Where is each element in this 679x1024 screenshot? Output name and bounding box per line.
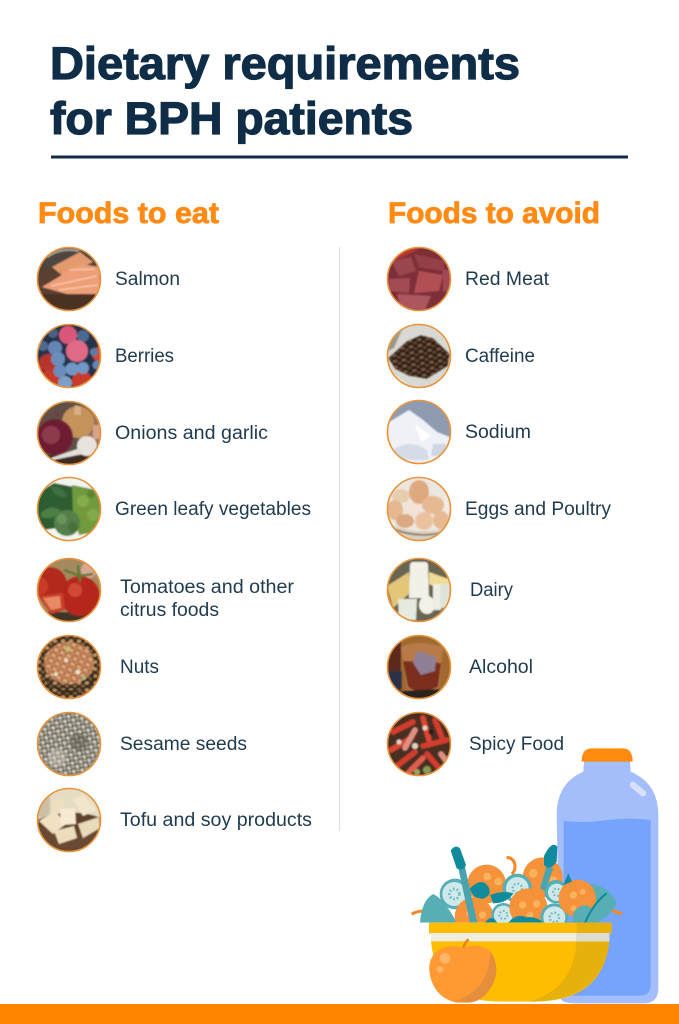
title: for BPH patients — [50, 93, 413, 144]
label: spicy food: Spicy Food — [469, 734, 564, 755]
title — [50, 38, 520, 144]
icon: bowl — [429, 923, 612, 1002]
label: salmon: Salmon — [115, 269, 180, 290]
icon: eggs — [386, 476, 452, 542]
label: dairy: Dairy — [470, 580, 513, 601]
label: tofu and soy products: Tofu and soy products — [120, 810, 312, 831]
label: sesame seeds: Sesame seeds — [120, 734, 247, 755]
label: berries: Berries — [115, 346, 174, 367]
icon: spicy food — [386, 711, 452, 777]
panel: foods to eat — [30, 246, 312, 853]
heading: foods to avoid: Foods to avoid — [388, 197, 600, 230]
icon: salad — [411, 844, 622, 923]
icon: water bottle — [557, 748, 658, 1003]
illustration: bottle, salad bowl and apple — [412, 748, 658, 1003]
heading: foods to eat: Foods to eat — [38, 197, 219, 230]
icon: alcohol — [386, 634, 452, 700]
label: tomatoes and other citrus foods: Tomatoes and other — [120, 577, 295, 598]
icon: caffeine — [386, 323, 452, 389]
icon: salmon — [36, 246, 102, 312]
label: caffeine: Caffeine — [465, 346, 535, 367]
icon: sodium — [386, 399, 452, 465]
icon: apple — [429, 939, 496, 1003]
label: onions and garlic: Onions and garlic — [115, 423, 268, 444]
icon: tomatoes — [36, 558, 102, 622]
icon: dairy — [386, 557, 452, 623]
icon: onions and garlic — [36, 400, 103, 466]
icon: sesame seeds — [36, 711, 102, 777]
label: eggs and poultry: Eggs and Poultry — [465, 499, 612, 520]
icon: green leafy vegetables — [36, 476, 102, 542]
label: red meat: Red Meat — [465, 269, 550, 290]
label: alcohol: Alcohol — [469, 657, 533, 678]
label: sodium: Sodium — [465, 422, 531, 443]
label: green leafy vegetables: Green leafy vegetables — [115, 499, 311, 520]
icon: tofu — [36, 787, 102, 853]
icon: nuts — [36, 634, 102, 700]
title: Dietary requirements — [50, 38, 520, 89]
label: tomatoes and other citrus foods: citrus foods — [120, 600, 219, 621]
label: nuts: Nuts — [120, 657, 159, 678]
panel: foods to avoid — [386, 246, 612, 777]
label: tomatoes and other citrus foods — [120, 577, 295, 621]
icon: berries — [36, 324, 102, 388]
footer bar — [0, 1004, 679, 1024]
icon: red meat — [386, 246, 452, 312]
